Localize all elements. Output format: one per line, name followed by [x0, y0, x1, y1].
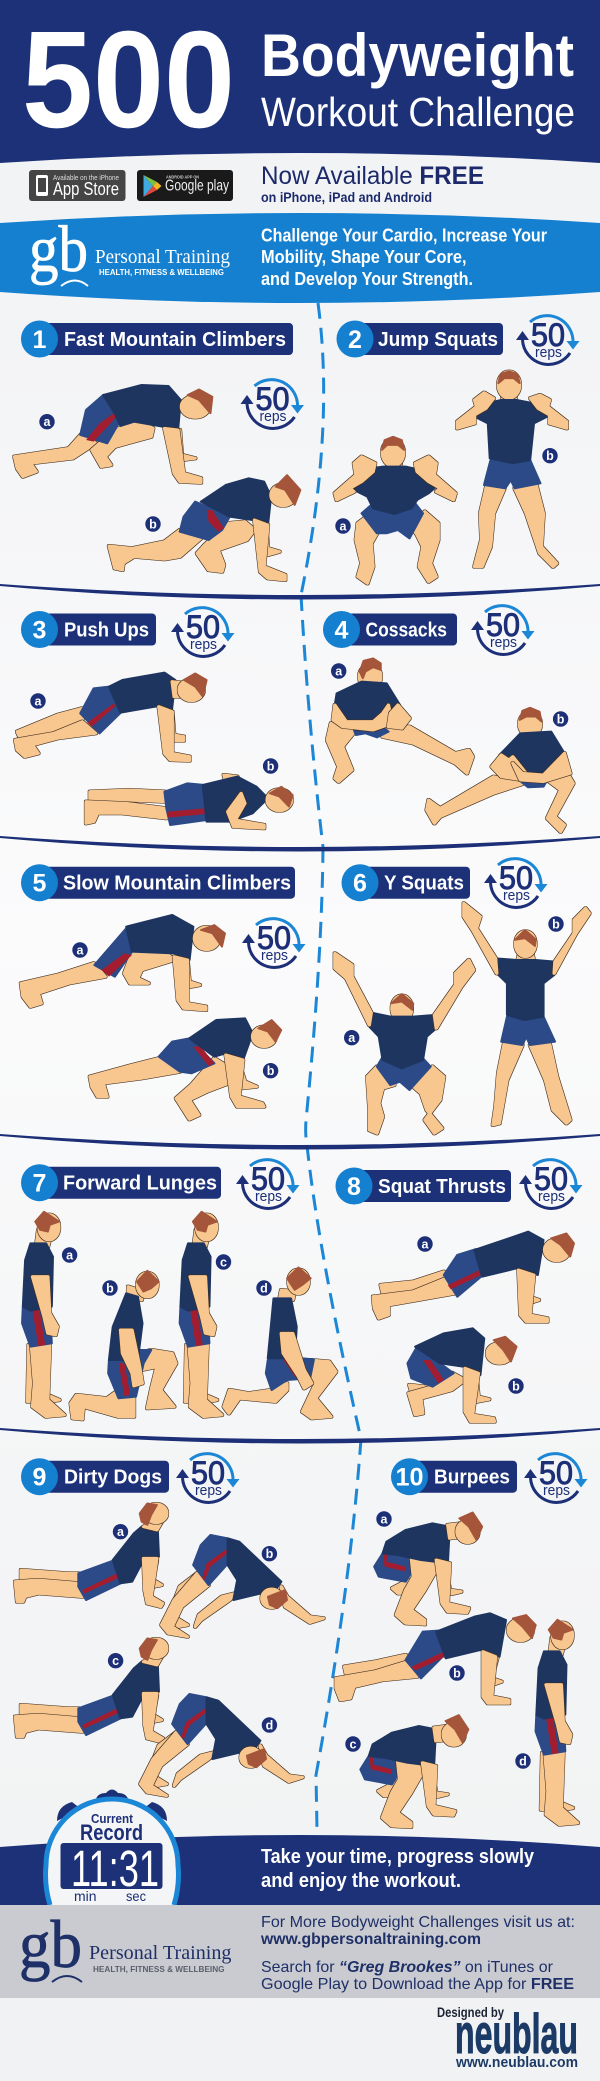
heading 9 [21, 1458, 169, 1495]
label 7c [216, 1254, 231, 1270]
figure 3b [86, 775, 293, 828]
heading 9: Dirty Dogs [64, 1467, 162, 1489]
reps badge 9 [176, 1454, 240, 1502]
reps badge 6: 50 [499, 860, 533, 896]
reps badge 10 [524, 1454, 588, 1502]
contact text: Google Play to Download the App for FREE [261, 1976, 574, 1993]
reps badge 7: reps [255, 1188, 282, 1205]
designer credit: www.neublau.com [455, 2054, 578, 2071]
label 10a [376, 1511, 392, 1527]
heading 4 [323, 611, 457, 648]
reps badge 4: reps [490, 634, 517, 651]
figure 1b [109, 475, 300, 580]
label 3b: b [267, 759, 275, 773]
reps badge 6 [484, 859, 548, 907]
reps badge 3: reps [190, 636, 217, 653]
figure 8b [408, 1328, 517, 1422]
figure 9c [15, 1638, 167, 1742]
google play badge: ANDROID APP ON [166, 174, 199, 179]
reps badge 6: reps [503, 887, 530, 904]
figure 1a [15, 385, 212, 483]
now available text: Now Available FREE [261, 162, 484, 190]
label 8b [508, 1378, 524, 1394]
label 5b [263, 1063, 278, 1078]
gb logo navy: gb [19, 1906, 82, 1982]
figure 10b [336, 1613, 536, 1703]
figure 10c [360, 1715, 468, 1827]
exercise 9 [15, 1454, 323, 1796]
label 6b [548, 916, 564, 932]
label 3a [30, 693, 46, 709]
label 1a [39, 414, 55, 429]
reps badge 7 [236, 1160, 300, 1208]
label 10c [345, 1736, 361, 1752]
label 10d [515, 1753, 531, 1769]
reps badge 8: reps [538, 1188, 565, 1205]
figure 3a [15, 673, 207, 761]
blue intro band [0, 213, 600, 303]
gb logo navy [19, 1906, 232, 1982]
heading 1: 1 [33, 326, 47, 354]
gb logo white [29, 213, 230, 286]
reps badge 2: reps [535, 344, 562, 361]
heading 5: 5 [33, 870, 47, 898]
heading 2: Jump Squats [378, 329, 498, 351]
stopwatch current record [46, 1790, 178, 1905]
contact text: www.gbpersonaltraining.com [260, 1931, 481, 1948]
reps badge 10: 50 [539, 1455, 573, 1491]
label 8a [417, 1236, 433, 1252]
label 6a: a [348, 1031, 356, 1045]
figure 9b [161, 1535, 323, 1637]
designer credit: Designed by [437, 2004, 504, 2020]
label 10c: c [350, 1737, 357, 1751]
app store badge: Available on the iPhone [53, 175, 119, 182]
heading 6 [342, 864, 470, 901]
label 7d: d [260, 1281, 268, 1295]
label 7b: b [106, 1281, 114, 1295]
intro text [261, 226, 547, 289]
exercise 3 [15, 608, 293, 828]
figure 7c [180, 1212, 222, 1417]
figure 4a [327, 658, 473, 782]
reps badge 5 [242, 919, 306, 967]
designer credit [437, 2002, 578, 2071]
title line 1: Bodyweight [261, 22, 574, 89]
dashed vertical divider [301, 303, 361, 1830]
reps badge 7: 50 [251, 1161, 285, 1197]
heading 8 [336, 1168, 511, 1204]
stopwatch current record: sec [126, 1888, 146, 1904]
intro text: and Develop Your Strength. [261, 269, 473, 289]
heading 6: 6 [353, 870, 367, 898]
gb logo navy: Personal Training [89, 1942, 232, 1964]
gb logo navy: HEALTH, FITNESS & WELLBEING [93, 1964, 225, 1974]
closing message: and enjoy the workout. [261, 1870, 461, 1892]
heading 4: 4 [335, 616, 349, 644]
label 6a [344, 1030, 359, 1045]
figure 9a [15, 1503, 167, 1607]
stopwatch current record: Record [80, 1820, 143, 1845]
label 2b [542, 448, 558, 463]
label 3a: a [35, 694, 43, 708]
title number: 500 [22, 3, 235, 157]
google play badge [137, 170, 233, 201]
intro text: Challenge Your Cardio, Increase Your [261, 226, 547, 246]
label 4a: a [335, 664, 343, 678]
reps badge 8 [519, 1160, 582, 1208]
stopwatch current record: Current [91, 1811, 134, 1826]
reps badge 1: 50 [256, 381, 290, 417]
label 8a: a [422, 1237, 430, 1251]
exercise 6 [335, 859, 589, 1133]
reps badge 8: 50 [534, 1161, 568, 1197]
contact text: Search for “Greg Brookes” on iTunes or [261, 1959, 554, 1976]
figure 6b [464, 903, 589, 1125]
closing message [261, 1846, 535, 1892]
figure 2a [335, 437, 455, 583]
app availability strip [29, 162, 484, 205]
label 10b: b [453, 1666, 461, 1680]
reps badge 10: reps [543, 1482, 570, 1499]
label 2a: a [340, 519, 348, 533]
reps badge 4: 50 [486, 607, 520, 643]
heading 2 [336, 320, 503, 358]
header banner [0, 0, 600, 163]
figure 7b [71, 1271, 176, 1419]
heading 10: 10 [396, 1464, 424, 1492]
label 6b: b [552, 917, 560, 931]
figure 9d [140, 1694, 302, 1796]
closing message: Take your time, progress slowly [261, 1846, 535, 1868]
label 9d [262, 1717, 277, 1733]
platforms text: on iPhone, iPad and Android [261, 190, 432, 205]
label 5a: a [77, 943, 85, 957]
reps badge 5: reps [261, 947, 288, 964]
label 10b [449, 1665, 465, 1681]
contact text [260, 1914, 575, 1993]
reps badge 9: 50 [191, 1455, 225, 1491]
figure 10d [536, 1620, 578, 1825]
label 7c: c [220, 1255, 227, 1269]
exercise 7 [21, 1160, 336, 1419]
gb logo white: Personal Training [95, 246, 230, 268]
label 9c: c [112, 1654, 119, 1668]
reps badge 2 [516, 316, 580, 364]
figure 7d [224, 1267, 336, 1418]
figure 10a [374, 1512, 482, 1624]
label 1b: b [149, 517, 157, 531]
reps badge 1 [240, 380, 304, 428]
stopwatch current record: min [74, 1888, 96, 1904]
reps badge 2: 50 [531, 317, 565, 353]
figure 2b [457, 371, 567, 567]
heading 10 [391, 1458, 517, 1495]
app store badge: App Store [53, 179, 119, 199]
label 9a: a [117, 1525, 125, 1539]
figure 6a [335, 953, 474, 1133]
heading 3: 3 [33, 616, 46, 644]
reps badge 1: reps [260, 408, 286, 425]
heading 5 [21, 864, 295, 901]
title line 2: Workout Challenge [261, 89, 575, 135]
exercise 4 [323, 606, 573, 832]
label 1b [145, 516, 161, 532]
reps badge 9: reps [195, 1482, 222, 1499]
heading 1 [21, 320, 293, 358]
gb logo white: gb [29, 213, 88, 286]
heading 3 [21, 611, 156, 648]
exercise 8 [336, 1160, 582, 1422]
heading 6: Y Squats [384, 873, 464, 895]
heading 8: Squat Thrusts [378, 1176, 506, 1198]
label 10a: a [381, 1512, 389, 1526]
app store badge [29, 170, 126, 201]
label 1a: a [44, 415, 52, 429]
gb logo white: HEALTH, FITNESS & WELLBEING [99, 267, 224, 277]
label 5a [72, 942, 88, 958]
figure 4b [427, 708, 573, 832]
heading 7 [21, 1164, 221, 1201]
label 4b [553, 711, 568, 727]
heading 7: Forward Lunges [63, 1173, 217, 1195]
heading 3: Push Ups [64, 620, 149, 642]
heading 2: 2 [348, 326, 362, 354]
label 9a [113, 1524, 128, 1539]
heading 1: Fast Mountain Climbers [64, 329, 286, 351]
label 7d [256, 1280, 272, 1296]
exercise 5 [21, 864, 306, 1119]
label 7b [102, 1280, 118, 1296]
figure 7a [22, 1212, 64, 1417]
exercise 1 [15, 320, 304, 580]
label 9c [108, 1653, 123, 1668]
intro text: Mobility, Shape Your Core, [261, 247, 466, 267]
label 9b: b [266, 1547, 274, 1561]
exercise 2 [335, 316, 580, 583]
reps badge 3 [171, 608, 234, 656]
label 2b: b [546, 449, 554, 463]
figure 5b [90, 1018, 281, 1119]
exercise 10 [336, 1454, 588, 1827]
heading 7: 7 [33, 1170, 46, 1198]
heading 8: 8 [347, 1173, 361, 1201]
heading 5: Slow Mountain Climbers [63, 873, 291, 895]
google play badge: Google play [165, 178, 229, 195]
figure 5a [21, 915, 225, 1010]
reps badge 4 [471, 606, 534, 654]
contact text: For More Bodyweight Challenges visit us at: [261, 1914, 575, 1931]
heading 4: Cossacks [366, 620, 447, 642]
label 8b: b [512, 1379, 520, 1393]
bottom navy band [0, 1835, 600, 1905]
label 9b [262, 1546, 277, 1561]
reps badge 5: 50 [257, 920, 291, 956]
grey contact panel [0, 1905, 600, 1998]
label 9d: d [266, 1718, 273, 1732]
label 7a [62, 1247, 77, 1263]
label 4b: b [557, 712, 565, 726]
label 5b: b [267, 1064, 275, 1078]
heading 9: 9 [33, 1464, 46, 1492]
figure 8a [373, 1232, 574, 1322]
label 10d: d [519, 1754, 527, 1768]
label 2a [335, 518, 351, 534]
heading 10: Burpees [434, 1467, 510, 1489]
reps badge 3: 50 [186, 609, 220, 645]
label 7a: a [66, 1248, 74, 1262]
label 4a [331, 663, 346, 679]
stopwatch current record: 11:31 [71, 1840, 159, 1897]
label 3b [263, 758, 278, 774]
